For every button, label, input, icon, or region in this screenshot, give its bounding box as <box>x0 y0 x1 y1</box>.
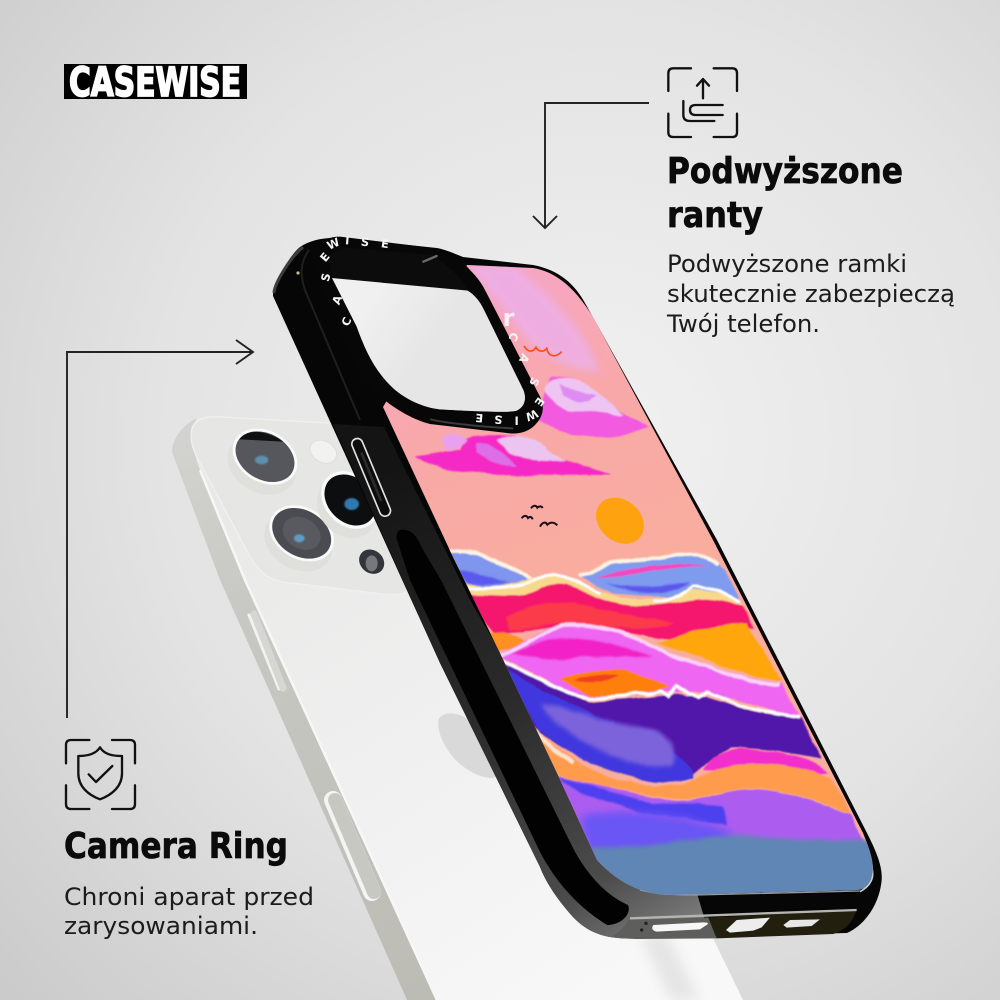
blue strokes <box>558 777 727 825</box>
icon: raised edges <box>668 68 737 137</box>
white phone <box>172 416 743 1000</box>
peach band <box>533 727 850 813</box>
ring lettering right: S <box>494 412 503 427</box>
case frame <box>273 238 882 938</box>
camera plateau <box>191 417 413 595</box>
ring lettering left <box>317 233 390 328</box>
mic dots <box>640 922 648 932</box>
magenta layer <box>498 623 802 718</box>
corner highlight <box>860 860 873 892</box>
bottom strip left <box>612 917 717 939</box>
frame groove <box>302 250 360 420</box>
ring lettering left: S <box>318 271 333 283</box>
arrow: left callout <box>67 340 253 718</box>
text: raised edges description: Twój telefon. <box>666 310 820 338</box>
phone side band <box>172 418 437 1000</box>
ring lettering right <box>475 330 548 427</box>
red patch <box>507 602 673 632</box>
inner wall <box>329 247 468 291</box>
ring gloss <box>430 419 513 428</box>
text: camera ring description: Chroni aparat przed <box>64 883 314 911</box>
heading: raised edges <box>667 151 903 236</box>
black band and slot <box>397 529 629 925</box>
pink stroke right <box>597 564 713 577</box>
arrow: top callout <box>533 103 649 228</box>
ring body <box>311 237 543 433</box>
bottom highlight line <box>630 910 857 918</box>
side buttons <box>249 614 374 892</box>
jagged white ridge <box>503 661 800 717</box>
camera ring <box>311 233 548 433</box>
lens 3 <box>305 459 391 550</box>
purple layer <box>502 660 822 782</box>
port speaker right <box>783 919 820 928</box>
ring lettering right: A <box>516 352 532 366</box>
sensor <box>354 544 389 579</box>
bottom ports <box>612 860 873 939</box>
blue right ridge <box>580 555 742 603</box>
cloud lower <box>415 433 612 477</box>
ring lettering left: E <box>380 236 390 251</box>
pale peach edge <box>535 730 573 763</box>
orange script <box>524 346 562 356</box>
logo: casewise: CASEWISE <box>69 60 241 106</box>
ring lettering right: E <box>532 395 548 409</box>
ring lettering right: C <box>506 330 522 344</box>
text: raised edges description: skutecznie zabezpieczą <box>667 280 955 308</box>
ring lettering right: E <box>475 411 484 425</box>
heading: raised edges: ranty <box>667 195 763 236</box>
ring lettering left: W <box>325 235 342 253</box>
text: raised edges description <box>666 250 955 338</box>
cloud upper <box>537 376 648 438</box>
ring lettering left: S <box>360 235 370 250</box>
artwork <box>370 255 890 907</box>
orange left <box>483 633 525 652</box>
ring lettering left: E <box>317 250 333 265</box>
dark blue right <box>607 582 690 593</box>
ring lettering right: S <box>526 375 542 388</box>
phone back <box>172 416 743 1000</box>
white letter: r <box>503 304 515 332</box>
heading: raised edges: Podwyższone <box>667 151 903 192</box>
dark blue left <box>453 570 510 585</box>
ring lettering left: I <box>345 233 350 247</box>
birds <box>522 506 557 527</box>
cream band <box>466 576 744 608</box>
frame glint <box>296 271 300 275</box>
side highlight <box>200 470 437 1000</box>
port speaker left <box>652 922 708 932</box>
sun <box>596 498 644 544</box>
heading: camera ring: Camera Ring <box>64 826 288 867</box>
text: raised edges description: Podwyższone ramki <box>667 250 907 278</box>
lens 1 <box>217 417 308 507</box>
text: camera ring description: zarysowaniami. <box>64 912 258 940</box>
ring lettering right: W <box>523 406 540 424</box>
phone case <box>273 233 890 939</box>
lilac wash <box>467 263 600 373</box>
magenta strokes <box>513 638 653 660</box>
blue left ridge <box>450 552 528 588</box>
text: camera ring description <box>64 883 314 940</box>
icon: shield <box>66 740 135 809</box>
lower shadow stripe <box>640 935 700 1000</box>
purple lilac lower <box>557 776 873 907</box>
port charging <box>726 918 770 933</box>
orange mid <box>560 669 670 697</box>
blue-violet left <box>505 668 694 783</box>
steel blue bottom <box>591 832 873 895</box>
violet soft band <box>580 812 733 855</box>
ring lettering right: I <box>515 413 519 427</box>
window <box>332 277 525 412</box>
flash <box>306 435 341 468</box>
apple logo <box>438 713 499 778</box>
orange right <box>657 623 782 682</box>
sky wash and clouds <box>415 263 653 553</box>
magenta hill <box>703 749 828 773</box>
side button <box>357 444 385 511</box>
hot pink layer <box>467 584 755 640</box>
sky <box>370 255 890 905</box>
mountain layers <box>440 551 880 907</box>
inner wall highlight <box>423 256 437 262</box>
lens 2 <box>253 494 344 583</box>
clouds <box>415 376 648 477</box>
frame corner highlight <box>274 248 302 292</box>
ring lettering left: A <box>329 293 345 307</box>
magenta edge highlight <box>500 625 780 685</box>
frame over phone <box>333 424 710 938</box>
ring lettering left: C <box>338 315 354 328</box>
art bottom edge <box>640 890 860 895</box>
bottom strip right <box>708 910 857 938</box>
lavender patch <box>540 703 675 767</box>
camera block <box>191 417 413 595</box>
